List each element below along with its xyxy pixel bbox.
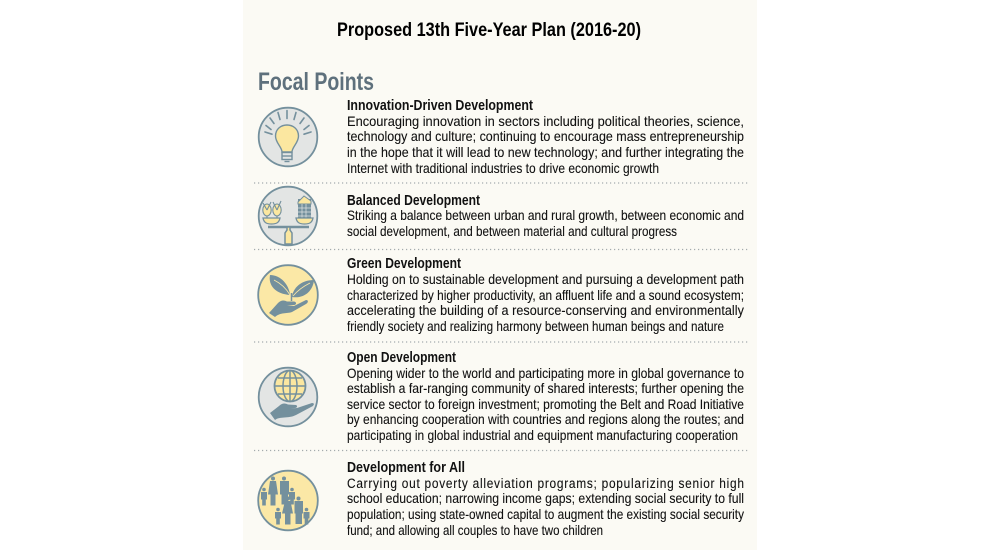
text: green development: friendly society and realizing harmony between human beings and nature	[347, 318, 724, 334]
text: development for all: population; using state-owned capital to augment the existing social security	[347, 506, 744, 522]
text: development for all	[347, 460, 744, 538]
text: balanced development: Striking a balance between urban and rural growth, between economic and	[347, 207, 744, 223]
icon: light bulb	[259, 108, 317, 166]
title: Proposed 13th Five-Year Plan (2016-20)	[337, 20, 641, 41]
heading: focal points: Focal Points	[258, 68, 374, 96]
text: development for all: fund; and allowing all couples to have two children	[347, 522, 603, 538]
icon: hand holding globe	[259, 368, 317, 426]
text: innovation-driven development: Internet with traditional industries to drive economic growth	[347, 160, 659, 176]
text: open development	[347, 350, 744, 443]
text: development for all: Carrying out poverty alleviation programs; popularizing senior high	[347, 475, 744, 491]
text: balanced development: Balanced Development	[347, 193, 480, 209]
text: green development: accelerating the building of a resource-conserving and environmentally	[347, 302, 744, 318]
text: open development: participating in global industrial and equipment manufacturing cooperation	[347, 427, 738, 443]
section: balanced development	[259, 187, 744, 245]
text: open development: service sector to foreign investment; promoting the Belt and Road Initiative	[347, 396, 744, 412]
section: development for all	[258, 460, 744, 538]
text: open development: Open Development	[347, 350, 456, 366]
text: innovation-driven development: Encouraging innovation in sectors including political theories, science,	[347, 113, 744, 129]
text: green development	[347, 256, 744, 334]
text: development for all: Development for All	[347, 460, 465, 476]
text: balanced development	[347, 193, 744, 239]
text: open development: Opening wider to the world and participating more in global governance to	[347, 365, 744, 381]
text: green development: Holding on to sustainable development and pursuing a development path	[347, 271, 744, 287]
section: open development	[259, 350, 744, 443]
text: open development: establish a far-ranging community of shared interests; further opening the	[347, 380, 744, 396]
text: open development: by enhancing cooperation with countries and regions along the routes; and	[347, 411, 744, 427]
icon: families	[258, 471, 318, 530]
icon: balance scale	[259, 187, 317, 245]
text: innovation-driven development: Innovation-Driven Development	[347, 98, 533, 114]
icon: hand holding plant	[258, 265, 318, 325]
section: green development	[258, 256, 744, 334]
text: green development: characterized by higher productivity, an affluent life and a sound ecosystem;	[347, 287, 744, 303]
text: innovation-driven development	[347, 98, 744, 176]
section: innovation-driven development	[259, 98, 744, 176]
panel: background	[243, 0, 757, 550]
text: green development: Green Development	[347, 256, 461, 272]
text: balanced development: social development, and between material and cultural progress	[347, 223, 677, 239]
text: development for all: school education; narrowing income gaps; extending social security to full	[347, 490, 744, 506]
text: innovation-driven development: in the hope that it will lead to new technology; and further integrating the	[347, 144, 744, 160]
text: innovation-driven development: technology and culture; continuing to encourage mass entrepreneurship	[347, 128, 744, 144]
